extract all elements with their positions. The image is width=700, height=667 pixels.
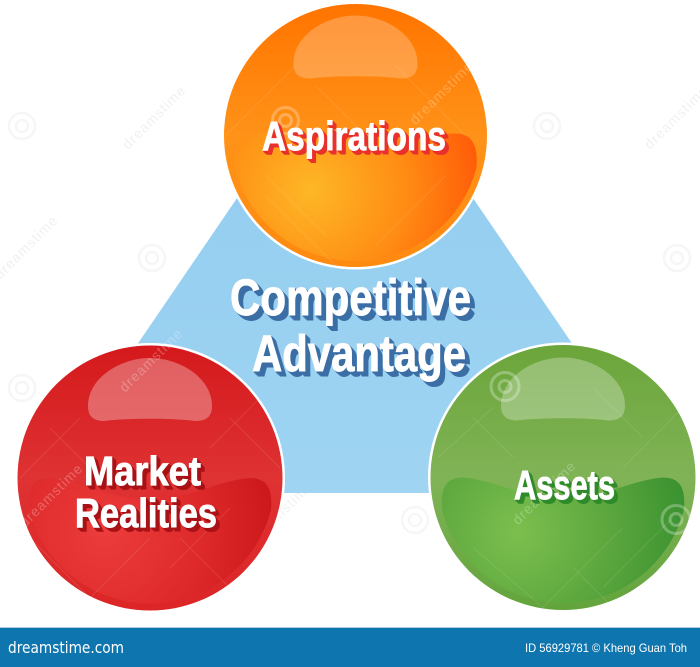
heading: competitive advantage: Advantage	[252, 325, 466, 382]
label: market realities	[75, 448, 217, 536]
background watermarks: dreamstime	[246, 477, 316, 547]
panel: aspirations sphere	[222, 2, 490, 270]
background watermarks	[0, 82, 700, 547]
panel: market realities sphere: dreamstime	[16, 460, 86, 530]
panel: market realities sphere	[15, 325, 285, 613]
footer bar	[0, 627, 700, 667]
heading: competitive advantage: Competitive	[230, 269, 471, 326]
heading: competitive advantage	[230, 269, 471, 382]
background watermarks: dreamstime	[119, 82, 189, 152]
panel: market realities sphere: dreamstime	[116, 325, 186, 395]
label: market realities: Market	[84, 448, 201, 494]
panel: assets sphere: dreamstime	[509, 458, 579, 528]
center triangle panel	[36, 25, 674, 493]
label: market realities: Realities	[75, 490, 217, 536]
panel: assets sphere	[428, 342, 698, 638]
footer credit: ID 56929781 © Kheng Guan Toh	[525, 641, 687, 655]
panel: aspirations sphere: dreamstime	[406, 58, 476, 128]
footer logo: dreamstime.com	[8, 638, 124, 657]
label: assets: Assets	[514, 462, 615, 508]
label: aspirations: Aspirations	[262, 113, 446, 159]
